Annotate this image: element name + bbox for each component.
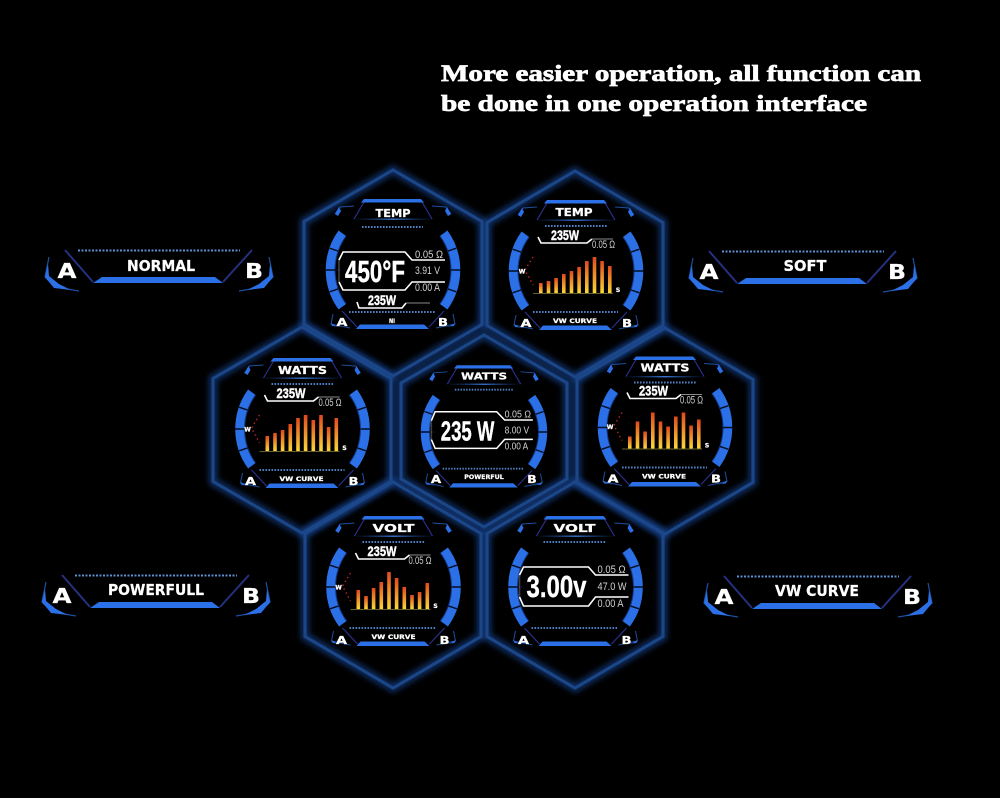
panel: WATTS VW curve right xyxy=(597,356,733,486)
panel: TEMP VW curve soft: VW CURVE xyxy=(553,317,597,325)
label: VW CURVE: A xyxy=(714,585,734,609)
bar chart xyxy=(607,412,709,450)
panel: VOLT 3.00v: 0.00 A xyxy=(598,598,624,610)
panel: TEMP 450F normal: 0.05 Ω xyxy=(415,249,443,261)
panel: WATTS 235W powerful: WATTS xyxy=(461,371,507,382)
label: POWERFULL: POWERFULL xyxy=(108,581,204,599)
panel: WATTS 235W powerful: 0.05 Ω xyxy=(505,409,531,420)
panel: VOLT 3.00v: VOLT xyxy=(554,523,597,535)
label: NORMAL: NORMAL xyxy=(127,257,195,275)
label: POWERFULL: B xyxy=(242,584,260,608)
bar chart xyxy=(335,572,438,610)
title text xyxy=(441,61,921,116)
panel: WATTS VW curve right: A xyxy=(608,472,619,486)
panel: VOLT 3.00v: B xyxy=(622,634,632,647)
bar chart: W xyxy=(519,268,526,276)
honeycomb hexagon outlines xyxy=(213,170,753,688)
panel: WATTS 235W powerful: 0.00 A xyxy=(505,441,528,452)
title text: be done in one operation interface xyxy=(441,91,867,116)
panel: TEMP VW curve soft: 235W xyxy=(551,227,580,243)
panel: TEMP VW curve soft: 0.05 Ω xyxy=(592,239,615,251)
panel: TEMP VW curve soft xyxy=(508,200,644,330)
bar chart: W xyxy=(244,426,251,434)
panel: TEMP 450F normal: 3.91 V xyxy=(415,265,441,277)
panel: TEMP VW curve soft: TEMP xyxy=(556,207,593,219)
panel: TEMP 450F normal: 0.00 A xyxy=(415,282,441,294)
bar chart xyxy=(244,415,347,452)
panel: TEMP VW curve soft: A xyxy=(520,317,532,330)
label: SOFT: A xyxy=(700,260,719,284)
label: VW CURVE: VW CURVE xyxy=(775,582,859,600)
panel: VOLT VW curve: A xyxy=(336,634,348,647)
bar chart: S xyxy=(705,442,709,450)
panel: WATTS VW curve left: 235W xyxy=(276,385,306,401)
label: VW CURVE: B xyxy=(903,585,921,609)
label: SOFT xyxy=(689,251,917,292)
panel: WATTS 235W powerful: 235 W xyxy=(441,415,495,447)
panel: VOLT VW curve: 235W xyxy=(368,543,397,559)
panel: VOLT 3.00v: 0.05 Ω xyxy=(598,564,626,576)
panel: TEMP 450F normal: TEMP xyxy=(376,208,411,220)
panel: WATTS VW curve right: WATTS xyxy=(640,362,690,374)
label: SOFT: SOFT xyxy=(784,257,827,275)
panel: TEMP 450F normal: 235W xyxy=(368,292,397,308)
panel: WATTS 235W powerful: A xyxy=(431,474,441,486)
panel: VOLT VW curve: VW CURVE xyxy=(371,633,416,641)
bar chart: S xyxy=(433,603,438,610)
panel: WATTS VW curve left: VW CURVE xyxy=(279,475,324,483)
panel: TEMP 450F normal: B xyxy=(438,316,448,329)
panel: WATTS VW curve right: 0.05 Ω xyxy=(680,394,703,406)
panel: WATTS 235W powerful xyxy=(420,365,548,487)
panel: TEMP VW curve soft: B xyxy=(622,317,632,330)
panel: VOLT VW curve: VOLT xyxy=(372,523,416,535)
bar chart: W xyxy=(607,424,614,431)
panel: TEMP 450F normal xyxy=(325,199,461,329)
panel: WATTS 235W powerful: 8.00 V xyxy=(505,425,529,436)
panel: WATTS VW curve left xyxy=(234,358,370,488)
label: NORMAL: A xyxy=(58,259,77,283)
label: VW CURVE xyxy=(704,576,932,617)
panel: TEMP 450F normal: 450°F xyxy=(345,254,405,289)
panel: TEMP 450F normal: NI xyxy=(389,318,395,325)
panel: WATTS VW curve right: 235W xyxy=(639,382,669,398)
panel: WATTS VW curve left: WATTS xyxy=(278,365,327,377)
panel: WATTS VW curve left: B xyxy=(348,475,358,488)
panel: TEMP 450F normal: A xyxy=(336,316,348,329)
bar chart: S xyxy=(616,287,620,294)
panel: WATTS 235W powerful: POWERFUL xyxy=(464,474,504,481)
panel: VOLT VW curve: 0.05 Ω xyxy=(408,555,432,567)
panel: VOLT VW curve: B xyxy=(440,634,450,647)
panel: WATTS VW curve right: VW CURVE xyxy=(642,472,686,480)
bar chart xyxy=(519,257,620,294)
bar chart: S xyxy=(342,445,347,452)
label: NORMAL xyxy=(45,250,273,291)
panel: VOLT 3.00v: A xyxy=(518,634,530,647)
panel: WATTS VW curve left: A xyxy=(245,475,257,488)
title text: More easier operation, all function can xyxy=(441,61,921,86)
panel: VOLT VW curve xyxy=(326,516,462,647)
bar chart: W xyxy=(335,584,342,592)
label: POWERFULL xyxy=(42,575,270,616)
label: POWERFULL: A xyxy=(52,584,72,608)
panel: VOLT 3.00v: 3.00v xyxy=(526,569,587,604)
label: NORMAL: B xyxy=(245,259,263,283)
panel: WATTS VW curve left: 0.05 Ω xyxy=(318,397,342,409)
panel: VOLT 3.00v: 47.0 W xyxy=(598,581,627,593)
label: SOFT: B xyxy=(888,260,906,284)
panel: VOLT 3.00v xyxy=(508,516,644,647)
panel: WATTS VW curve right: B xyxy=(711,472,721,486)
panel: WATTS 235W powerful: B xyxy=(527,474,537,486)
